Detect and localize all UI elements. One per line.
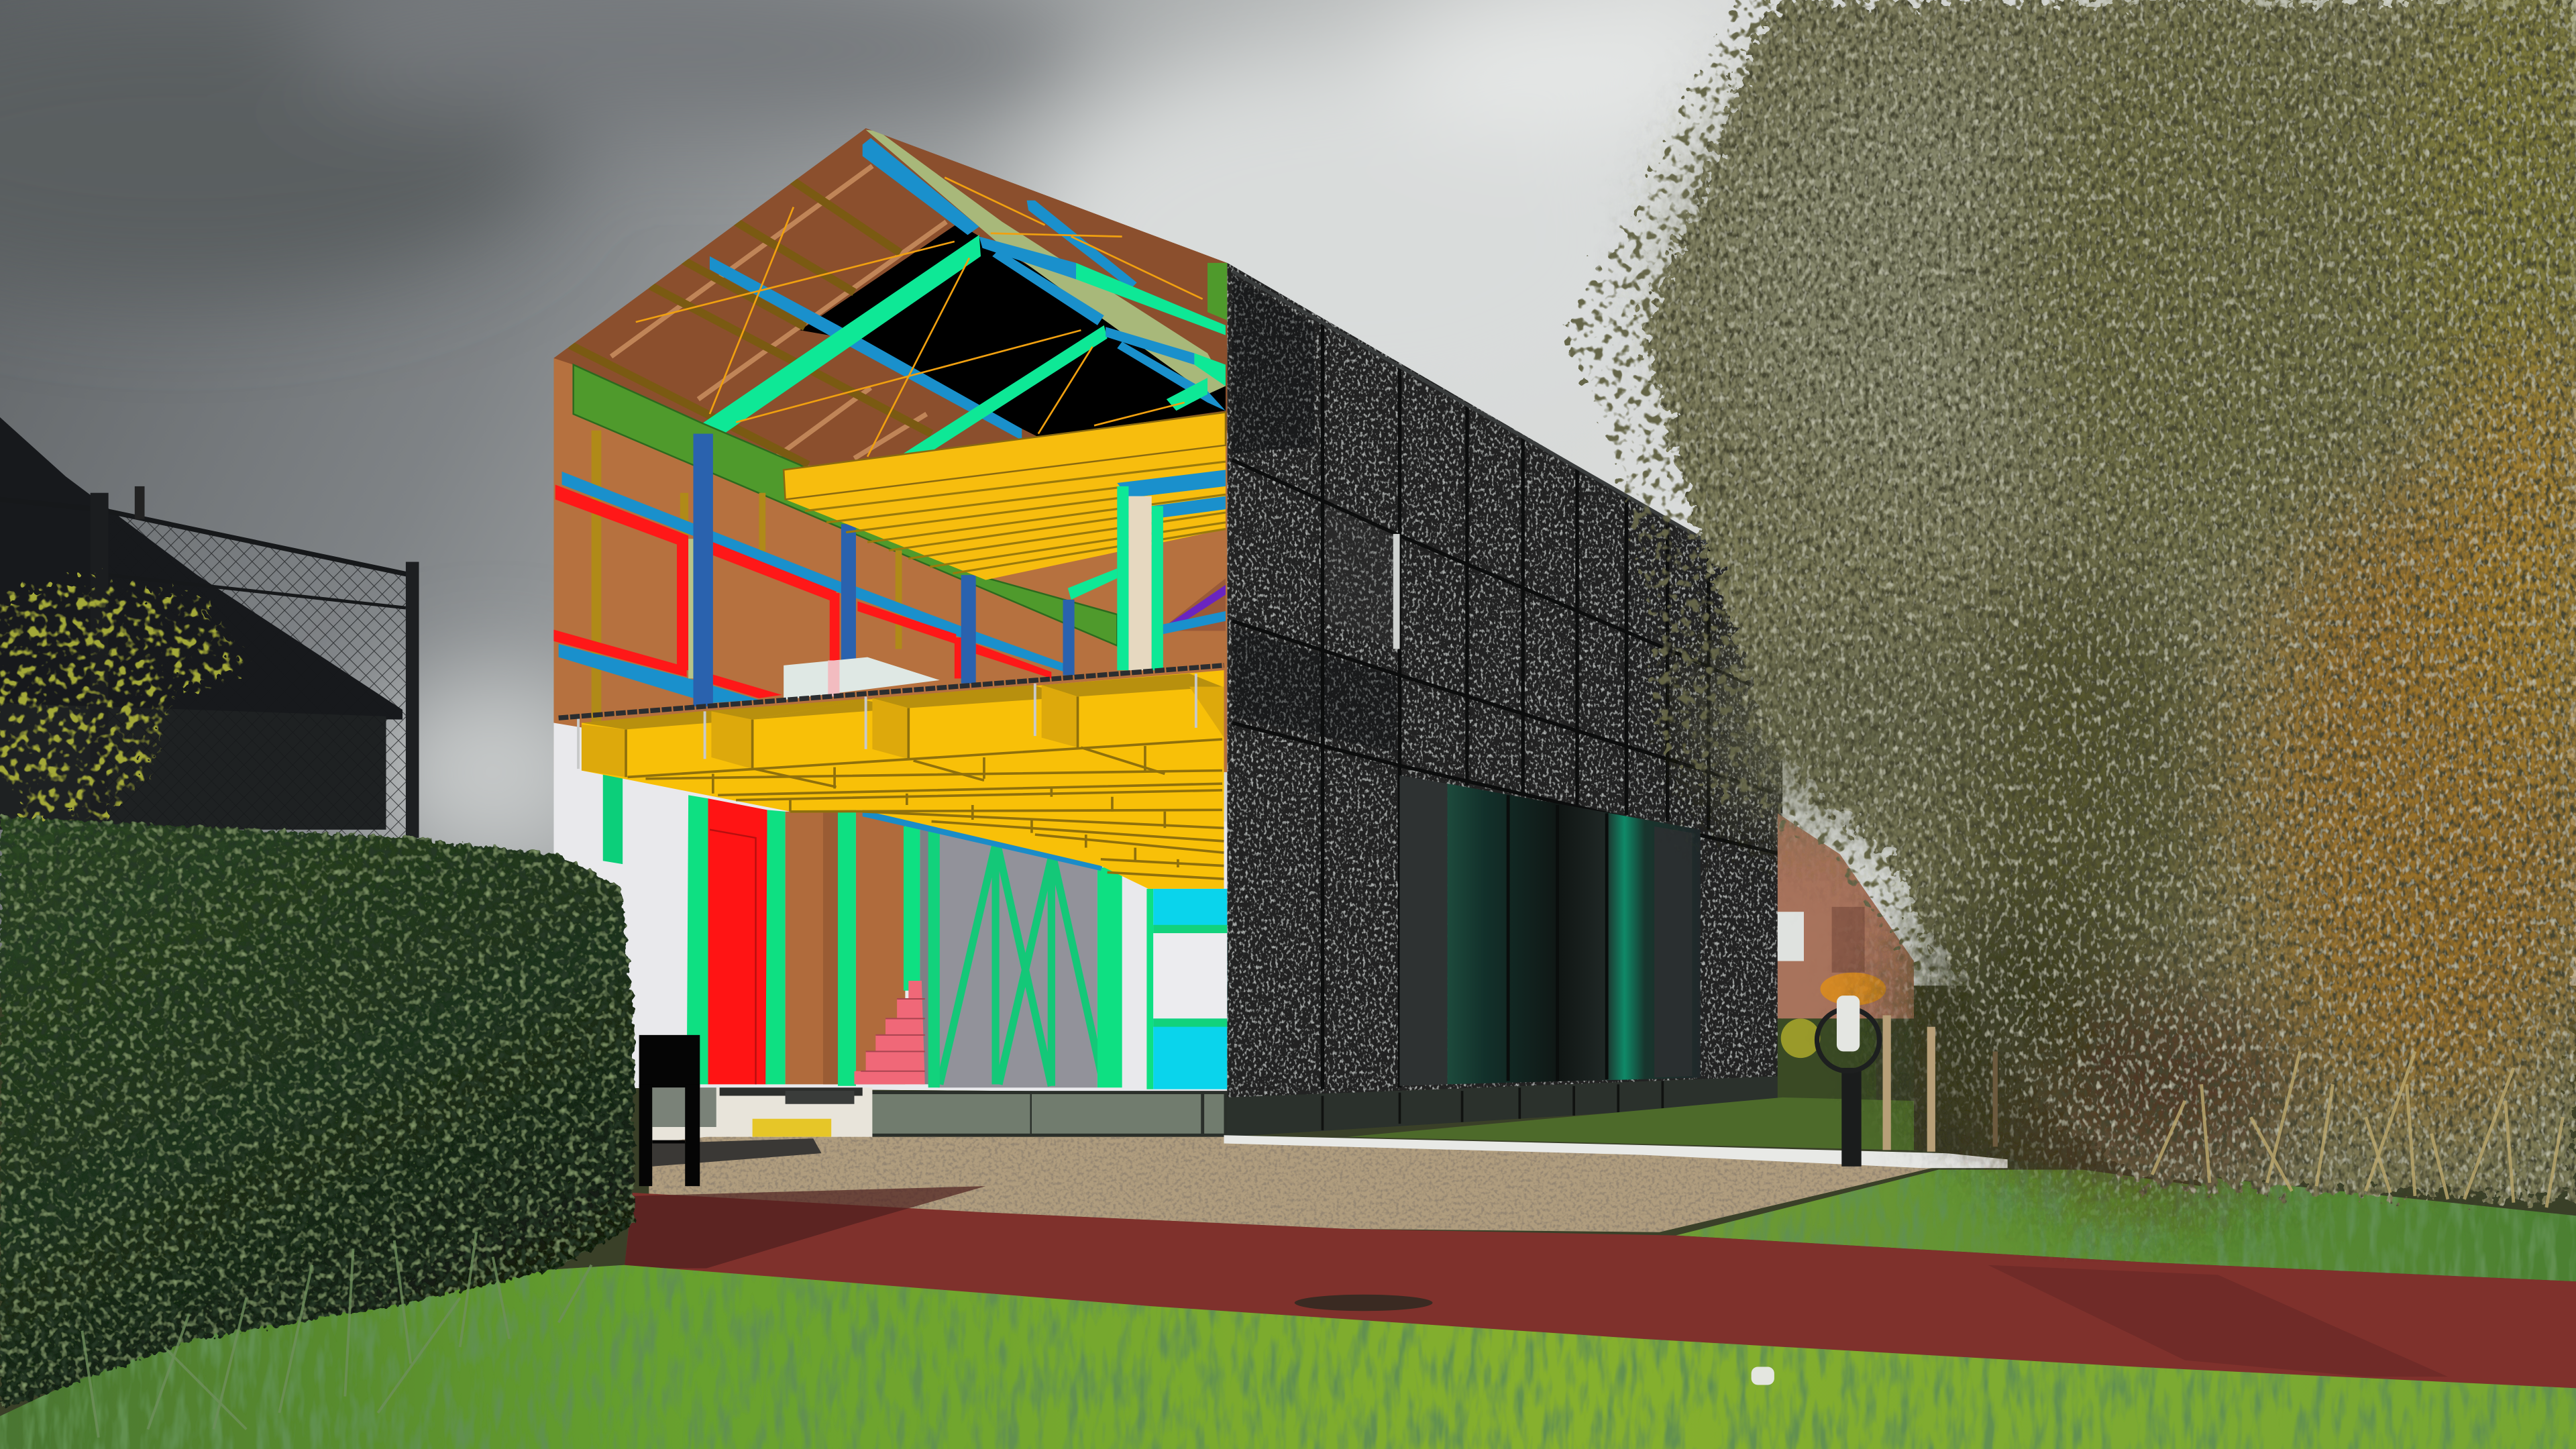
plinth: [1227, 1076, 1782, 1137]
dark brush behind tree: [1914, 985, 2202, 1186]
roof rafters tan: [611, 166, 947, 460]
back lawn: [1347, 1097, 2037, 1153]
upper floor joists: [784, 413, 1226, 580]
foreground grass: [0, 1265, 2576, 1449]
glass box: [784, 657, 940, 700]
gravel bed: [649, 1137, 1939, 1232]
glazed front: [1448, 784, 1701, 1084]
red cycle path: [625, 1186, 2576, 1388]
joist side faces: [582, 685, 1224, 777]
grass tufts by hedge: [82, 1232, 592, 1438]
EV charger post: [1817, 996, 1880, 1167]
fence posts by path: [1883, 1015, 1998, 1152]
BIM cutaway: [552, 128, 1227, 1093]
neighbouring house: [0, 417, 402, 830]
green struts right: [1068, 568, 1117, 600]
stairs: [854, 981, 925, 1084]
lower floor deck: [559, 665, 1224, 889]
door frames upper: [1117, 470, 1226, 670]
door: [1400, 775, 1448, 1086]
blue rails: [562, 472, 845, 595]
wall backing: [553, 329, 1227, 772]
blue purlin: [710, 256, 1022, 440]
blue columns: [693, 434, 713, 706]
sunlit strip: [1393, 534, 1400, 649]
building facade: [1227, 263, 1782, 1137]
green truss rafters: [702, 235, 981, 443]
drain cover: [1295, 1295, 1433, 1311]
yellow-green shrub leaves: [0, 578, 255, 821]
hangers: [578, 674, 1196, 769]
red rails: [555, 484, 688, 549]
black mailbox: [639, 1035, 700, 1186]
plinth under the cutaway: [652, 1087, 1227, 1143]
reeds: [2152, 1051, 2563, 1208]
right lawn: [1676, 1170, 2576, 1281]
hedge: [0, 816, 634, 1409]
roof underside: [553, 128, 1227, 468]
upper roof beams: [866, 129, 1226, 394]
green edge beam: [574, 365, 1117, 645]
white kerb: [1224, 1135, 2008, 1168]
orange tie rods: [636, 177, 1203, 457]
wispy outer foliage over facade and sky: [1569, 0, 2300, 1134]
roof void: [800, 223, 1226, 437]
facade panel joints: [1232, 271, 1782, 1089]
tree foliage: [1643, 0, 2576, 1199]
sky: [0, 0, 2576, 985]
grey brace bay: [938, 828, 1097, 1087]
lower wall members: [603, 772, 1227, 1089]
joist top faces: [582, 674, 1222, 729]
fence: [0, 486, 419, 838]
cyan window unit: [1146, 889, 1153, 1089]
white lower wall: [553, 723, 1227, 1093]
wall framing: [552, 431, 1075, 723]
brick house behind: [1778, 813, 1914, 1101]
roof purlins: [570, 179, 932, 465]
underside grid: [626, 696, 1224, 879]
